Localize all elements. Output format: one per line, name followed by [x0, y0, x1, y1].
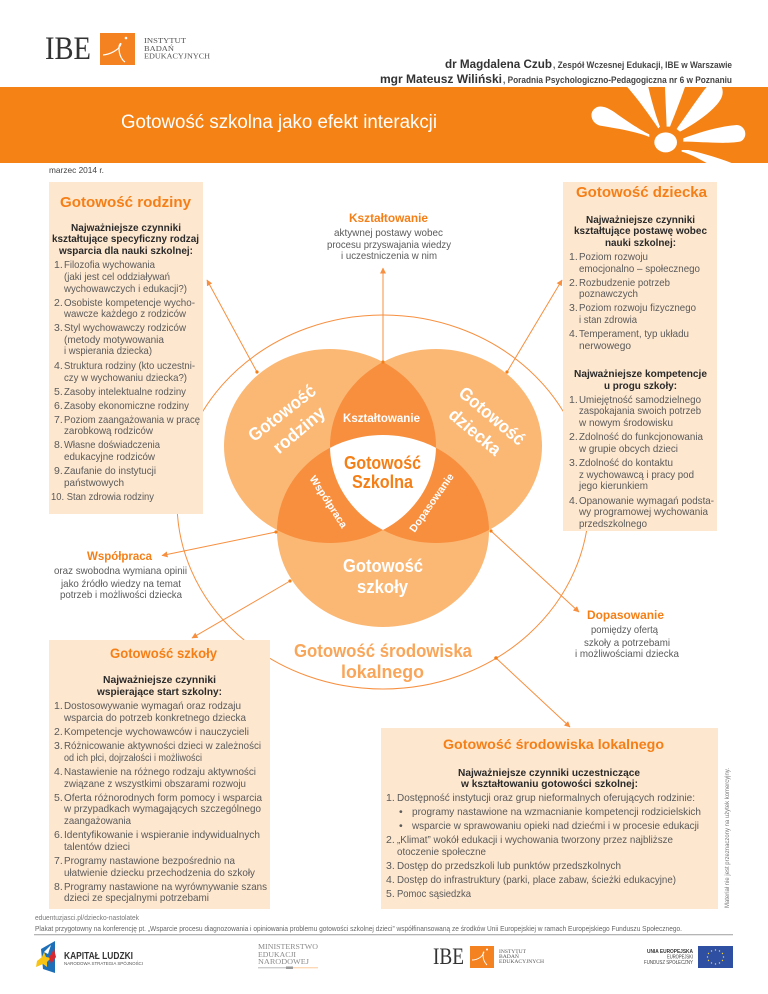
callout: Współpraca	[54, 551, 187, 601]
outer circle: Gotowość środowiska lokalnego	[177, 315, 589, 689]
label: Gotowość środowiska lokalnego: Gotowość środowiska	[294, 641, 473, 661]
factor list: 1.	[54, 700, 63, 712]
authors	[380, 57, 732, 86]
factor list	[51, 259, 200, 503]
subheading: attitude factors	[574, 214, 707, 249]
factor list: od ich płci, dojrzałości i możliwości	[64, 752, 202, 764]
label: Gotowość szkoły: Gotowość	[343, 556, 423, 576]
list: attitude factors: Poziom rozwoju fizycznego	[579, 302, 696, 314]
factor list: 5.	[54, 792, 63, 804]
panel: Gotowość dziecka	[563, 182, 717, 531]
logo: Kapitał Ludzki: NARODOWA STRATEGIA SPÓJNOŚCI	[64, 959, 143, 967]
list: competences: Opanowanie wymagań podsta-	[579, 495, 714, 507]
factor list: 2.	[54, 726, 63, 738]
logo: Ministerstwo Edukacji Narodowej: EDUKACJI	[258, 950, 297, 959]
factor list: 10. Stan zdrowia rodziny	[51, 491, 155, 503]
list: competences: wy programowej wychowania	[578, 506, 708, 518]
factor list: Osobiste kompetencje wycho-	[64, 297, 195, 309]
callout: Kształtowanie: Kształtowanie	[349, 213, 428, 225]
label: Gotowość Szkolna: Szkolna	[352, 472, 414, 492]
factor list: programy nastawione na wzmacnianie kompetencji rodzicielskich	[412, 806, 701, 818]
factor list: Dostępność instytucji oraz grup nieformalnych oferujących rodzinie:	[397, 792, 695, 804]
logo: IBE footer: IBE	[433, 944, 464, 969]
label: Gotowość rodziny: rodziny	[269, 402, 329, 458]
venn diagram	[224, 349, 542, 627]
factor list: 3.	[386, 860, 395, 872]
subheading: attitude factors: kształtujące postawę wobec	[574, 225, 707, 237]
arrow: shaping	[381, 268, 385, 364]
subheading	[458, 767, 640, 790]
factor list	[386, 792, 701, 900]
callout: Kształtowanie	[327, 213, 452, 262]
heading: Gotowość dziecka	[576, 184, 708, 201]
list: attitude factors: Temperament, typ układu	[579, 328, 689, 340]
factor list: 3.	[54, 322, 63, 334]
factor list: związane z wszystkimi obszarami rozwoju	[64, 778, 246, 790]
list: competences: Zdolność do funkcjonowania	[579, 431, 703, 443]
factor list: •	[399, 806, 403, 818]
arrow: family	[207, 280, 259, 374]
factor list: edukacyjne rodziców	[64, 451, 155, 463]
factor list: państwowych	[64, 477, 124, 489]
factor list: Programy nastawione bezpośrednio na	[64, 855, 235, 867]
factor list: Filozofia wychowania	[64, 259, 155, 271]
factor list: Nastawienie na różnego rodzaju aktywności	[64, 766, 256, 778]
authors: dr Magdalena Czub	[445, 57, 552, 71]
factor list: zaangażowania	[64, 815, 131, 827]
subheading: kształtujące specyficzny rodzaj	[52, 233, 199, 245]
factor list: Pomoc sąsiedzka	[397, 888, 471, 900]
factor list: czy w wychowaniu dziecka?)	[64, 372, 187, 384]
logo: Unia Europejska	[644, 946, 733, 968]
factor list: Poziom zaangażowania w pracę	[64, 414, 200, 426]
label: Gotowość środowiska lokalnego	[294, 641, 473, 682]
logo: IBE header	[45, 31, 211, 67]
factor list: 8.	[54, 881, 63, 893]
callout: Kształtowanie: i uczestniczenia w nim	[341, 250, 437, 262]
arrow: matching	[489, 529, 579, 612]
list: competences: w grupie obcych dzieci	[578, 443, 678, 455]
logo: Ministerstwo Edukacji Narodowej: NARODOWEJ	[258, 957, 309, 966]
factor list: 3.	[54, 740, 63, 752]
callout: Dopasowanie: Dopasowanie	[587, 610, 664, 622]
factor list: Identyfikowanie i wspieranie indywidualnych	[64, 829, 260, 841]
panel: Gotowość szkoły	[49, 640, 270, 909]
footer text	[35, 913, 682, 933]
logo: Kapitał Ludzki	[36, 941, 143, 973]
factor list: otoczenie społeczne	[397, 846, 486, 858]
icon: white flower	[591, 87, 745, 163]
list: competences: 4.	[569, 495, 578, 507]
factor list: Własne doświadczenia	[64, 439, 160, 451]
date: marzec 2014 r.	[49, 165, 104, 175]
factor list: ułatwienie dziecku przechodzenia do szkoły	[64, 867, 256, 879]
panel: Gotowość rodziny	[49, 182, 203, 514]
label: Gotowość szkoły: szkoły	[357, 577, 408, 597]
arrow: cooperation	[162, 530, 278, 556]
factor list: wsparcie w sprawowaniu opieki nad dziećmi i w procesie edukacji	[411, 820, 699, 832]
label: Gotowość rodziny: Gotowość	[244, 380, 320, 446]
list: competences: Zdolność do kontaktu	[579, 457, 673, 469]
subheading	[96, 674, 222, 698]
list: attitude factors: emocjonalno – społecznego	[579, 263, 700, 275]
vertical note: Materiał nie jest przeznaczony na użytek komercyjny.	[724, 768, 731, 908]
list: attitude factors: nerwowego	[579, 340, 631, 352]
arrow: local community	[494, 656, 570, 727]
list: competences: zaspokajania swoich potrzeb	[579, 405, 701, 417]
factor list: 4.	[54, 766, 63, 778]
subheading: Najważniejsze czynniki uczestniczące	[458, 767, 640, 779]
label: Gotowość dziecka: dziecka	[445, 404, 506, 460]
factor list: (metody motywowania	[64, 334, 164, 346]
label: Współpraca: Współpraca	[307, 474, 349, 531]
logo: Kapitał Ludzki: KAPITAŁ LUDZKI	[64, 951, 133, 962]
logo: IBE footer	[433, 944, 544, 969]
list: attitude factors: 2.	[569, 277, 578, 289]
factor list: i wspierania dziecka)	[64, 345, 152, 357]
factor list: Dostosowywanie wymagań oraz rodzaju	[64, 700, 241, 712]
logo: IBE header: EDUKACYJNYCH	[144, 52, 211, 60]
logo: Ministerstwo Edukacji Narodowej	[258, 942, 319, 969]
logo: IBE header: IBE	[45, 31, 91, 67]
label: Gotowość dziecka: Gotowość	[455, 383, 529, 449]
factor list	[54, 700, 267, 904]
list: competences: jego kierunkiem	[578, 480, 648, 492]
factor list: Oferta różnorodnych form pomocy i wsparcia	[64, 792, 262, 804]
factor list: talentów dzieci	[64, 841, 130, 853]
factor list: w przypadkach wymagających szczególnego	[63, 803, 261, 815]
callout: Dopasowanie: i możliwościami dziecka	[575, 648, 679, 660]
arrow: school	[192, 579, 292, 638]
arrow: child	[505, 280, 562, 374]
factor list: 7.	[54, 414, 63, 426]
factor list: Programy nastawione na wyrównywanie szans	[64, 881, 267, 893]
title: Gotowość szkolna jako efekt interakcji	[121, 112, 437, 133]
list: competences	[569, 394, 714, 530]
callout: Dopasowanie	[575, 610, 679, 660]
logo: Unia Europejska: EUROPEJSKI	[667, 954, 693, 960]
list: competences: 3.	[569, 457, 578, 469]
factor list: dzieci ze specjalnymi potrzebami	[64, 892, 209, 904]
factor list: Struktura rodziny (kto uczestni-	[64, 360, 195, 372]
subheading: wsparcia dla nauki szkolnej:	[58, 245, 193, 257]
logo: Unia Europejska: FUNDUSZ SPOŁECZNY	[644, 960, 694, 966]
icon: EU flag	[698, 946, 733, 968]
list: competences: Umiejętność samodzielnego	[579, 394, 701, 406]
subheading: wspierające start szkolny:	[96, 686, 222, 698]
label: Gotowość szkoły	[343, 556, 423, 597]
heading: Gotowość środowiska lokalnego	[443, 737, 664, 752]
subheading: w kształtowaniu gotowości szkolnej:	[460, 778, 638, 790]
label: Gotowość Szkolna	[344, 453, 421, 492]
factor list: 6.	[54, 400, 63, 412]
callout: Współpraca: Współpraca	[87, 551, 153, 563]
factor list: Styl wychowawczy rodziców	[64, 322, 186, 334]
list: attitude factors: i stan zdrowia	[579, 314, 637, 326]
factor list: Dostęp do przedszkoli lub punktów przedszkolnych	[397, 860, 621, 872]
logo: Unia Europejska: UNIA EUROPEJSKA	[647, 949, 693, 955]
factor list: wychowawczych i edukacji?)	[63, 283, 187, 295]
panel: Gotowość środowiska lokalnego	[381, 728, 718, 909]
logo: IBE footer: INSTYTUT	[499, 949, 527, 955]
factor list: 5.	[54, 386, 63, 398]
callout: Kształtowanie: aktywnej postawy wobec	[334, 227, 443, 239]
list: attitude factors	[569, 251, 700, 352]
subheading	[52, 222, 199, 257]
factor list: 5.	[386, 888, 395, 900]
list: attitude factors: Poziom rozwoju	[579, 251, 648, 263]
factor list: 1.	[54, 259, 63, 271]
callout: Współpraca: potrzeb i możliwości dziecka	[60, 589, 182, 601]
factor list: 4.	[54, 360, 63, 372]
list: competences: z wychowawcą i pracy pod	[579, 469, 694, 481]
factor list: (jaki jest cel oddziaływań	[64, 271, 170, 283]
banner	[0, 87, 768, 163]
factor list: wawcze każdego z rodziców	[63, 308, 186, 320]
label: Gotowość środowiska lokalnego: lokalnego	[341, 662, 424, 682]
list: attitude factors: 3.	[569, 302, 578, 314]
logo: IBE footer: EDUKACYJNYCH	[499, 959, 544, 965]
factor list: wsparcia do potrzeb konkretnego dziecka	[63, 712, 246, 724]
authors: , Zespół Wczesnej Edukacji, IBE w Warszawie	[553, 60, 732, 70]
factor list: 7.	[54, 855, 63, 867]
list: competences: w nowym środowisku	[578, 417, 673, 429]
footer text: Plakat przygotowny na konferencję pt. „Wsparcie procesu diagnozowania i opiniowania problemu gotowości szkolnej dzieci” współfinansowaną ze środków Unii Europejskiej w ramach Europejskiego Funduszu Społecznego.	[35, 924, 682, 933]
list: attitude factors: 4.	[569, 328, 578, 340]
subheading: Najważniejsze czynniki	[103, 674, 216, 686]
factor list: 8.	[54, 439, 63, 451]
subheading: attitude factors: nauki szkolnej:	[605, 237, 676, 249]
factor list: Zaufanie do instytucji	[64, 465, 156, 477]
factor list: 2.	[386, 834, 395, 846]
factor list: Dostęp do infrastruktury (parki, place zabaw, ścieżki edukacyjne)	[397, 874, 676, 886]
factor list: Zasoby intelektualne rodziny	[64, 386, 187, 398]
subheading: attitude factors: Najważniejsze czynniki	[586, 214, 695, 226]
callout: Dopasowanie: szkoły a potrzebami	[584, 637, 670, 649]
factor list: •	[399, 820, 403, 832]
subheading: competences: Najważniejsze kompetencje	[574, 368, 707, 380]
logo: IBE header: BADAŃ	[144, 43, 175, 53]
heading: Gotowość szkoły	[110, 646, 217, 661]
callout: Dopasowanie: pomiędzy ofertą	[591, 624, 658, 636]
authors: mgr Mateusz Wiliński	[380, 72, 502, 86]
list: competences: 2.	[569, 431, 578, 443]
logo: IBE header: INSTYTUT	[144, 36, 186, 45]
list: attitude factors: Rozbudzenie potrzeb	[579, 277, 670, 289]
subheading: Najważniejsze czynniki	[71, 222, 181, 234]
label: Kształtowanie: Kształtowanie	[343, 413, 420, 425]
factor list: zarobkową rodziców	[64, 425, 153, 437]
list: competences: przedszkolnego	[579, 518, 647, 530]
factor list: Różnicowanie aktywności dzieci w zależności	[64, 740, 261, 752]
callout: Współpraca: oraz swobodna wymiana opinii	[54, 565, 187, 577]
heading: Gotowość rodziny	[60, 194, 192, 211]
factor list: „Klimat” wokół edukacji i wychowania tworzony przez najbliższe	[397, 834, 673, 846]
factor list: 6.	[54, 829, 63, 841]
factor list: 2.	[54, 297, 63, 309]
callout: Kształtowanie: procesu przyswajania wiedzy	[327, 239, 452, 251]
factor list: Zasoby ekonomiczne rodziny	[64, 400, 190, 412]
list: attitude factors: poznawczych	[579, 288, 638, 300]
list: attitude factors: 1.	[569, 251, 578, 263]
label: Dopasowanie: Dopasowanie	[407, 471, 457, 535]
callout: Współpraca: jako źródło wiedzy na temat	[60, 578, 181, 590]
subheading: competences: u progu szkoły:	[604, 380, 677, 392]
factor list: 9.	[54, 465, 63, 477]
logo: IBE footer: BADAŃ	[499, 952, 519, 960]
list: competences: 1.	[569, 394, 578, 406]
factor list: 1.	[386, 792, 395, 804]
logo: Ministerstwo Edukacji Narodowej: MINISTERSTWO	[258, 942, 319, 951]
authors: , Poradnia Psychologiczno-Pedagogiczna nr 6 w Poznaniu	[503, 75, 732, 85]
footer text: eduentuzjasci.pl/dziecko-nastolatek	[35, 913, 139, 922]
label: Gotowość Szkolna: Gotowość	[344, 453, 421, 473]
factor list: 4.	[386, 874, 395, 886]
factor list: Kompetencje wychowawców i nauczycieli	[64, 726, 249, 738]
subheading: competences	[574, 368, 707, 392]
